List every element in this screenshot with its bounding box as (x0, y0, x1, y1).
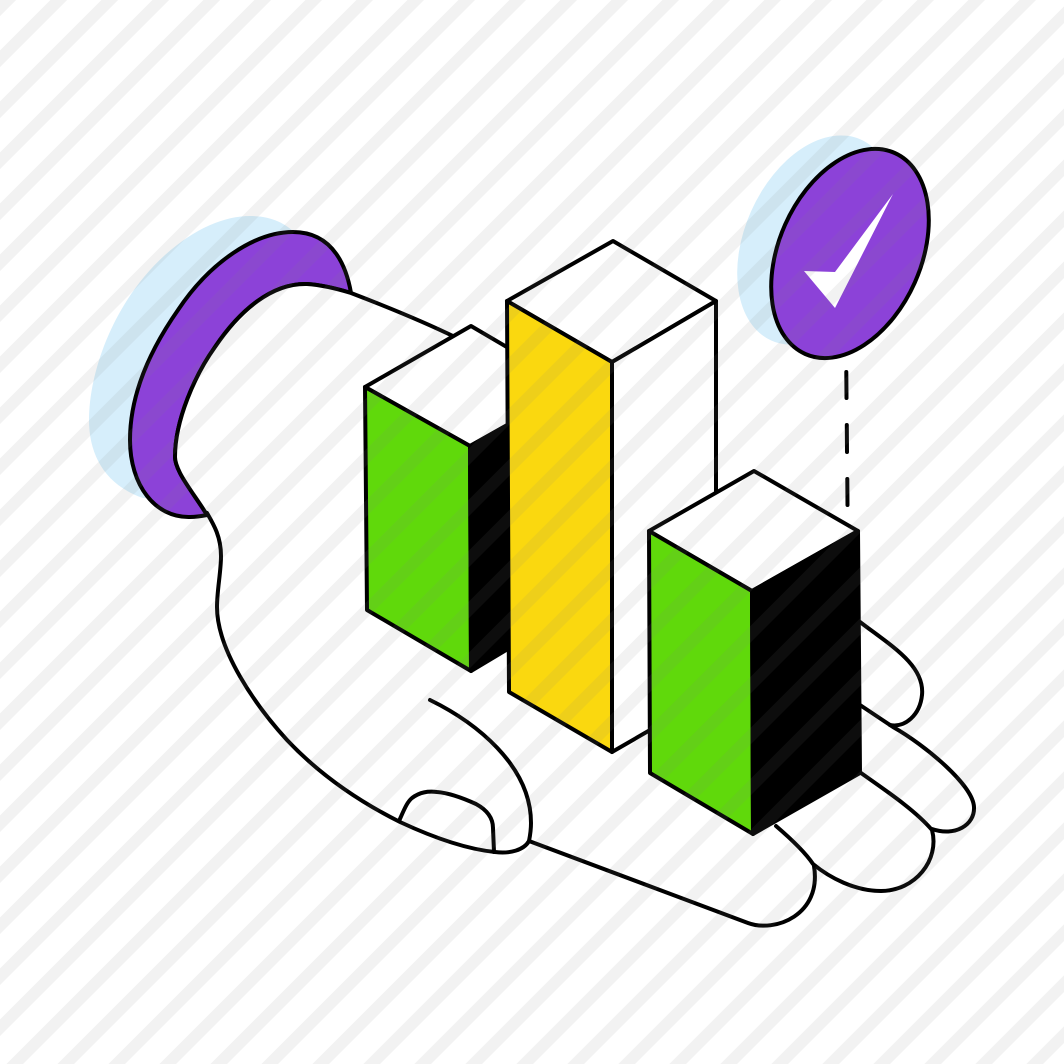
yellow face (507, 301, 612, 752)
black face (752, 531, 860, 834)
green face (365, 387, 471, 671)
top face (649, 471, 858, 591)
check badge (740, 124, 960, 383)
blue shadow behind badge (706, 111, 926, 369)
fingers (860, 622, 922, 725)
dashed connector (846, 372, 848, 505)
black face (470, 387, 575, 671)
badge disc (740, 124, 960, 383)
thumbnail (399, 792, 494, 852)
left green bar (365, 326, 575, 671)
blue shadow behind hand cuff (89, 216, 298, 500)
green face (649, 531, 753, 834)
top face (507, 241, 716, 362)
icon: check mark (804, 194, 893, 308)
right green bar (649, 471, 860, 834)
hand fill (175, 284, 450, 560)
purple cuff (130, 232, 351, 517)
thumb (430, 700, 531, 841)
top face (365, 326, 575, 446)
palm edge (175, 284, 815, 926)
white face (612, 301, 716, 752)
hand outline (175, 284, 974, 926)
middle yellow bar (507, 241, 716, 752)
